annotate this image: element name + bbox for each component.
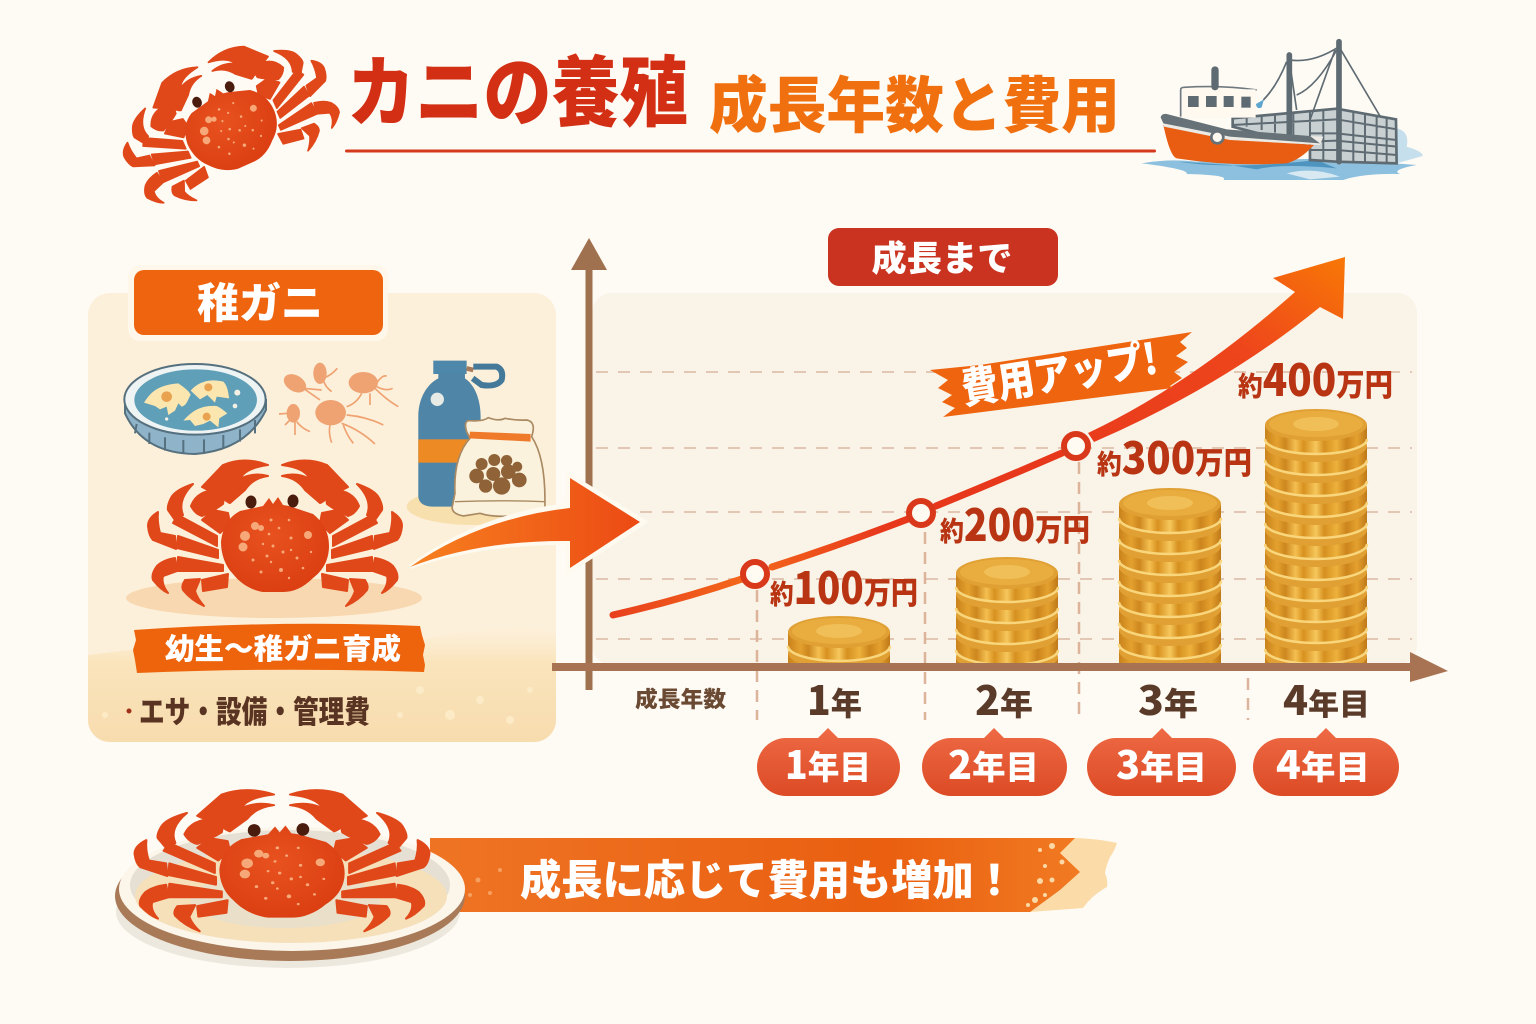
axis: horizontal [552, 652, 1448, 682]
pill: year 2: 2年目 [948, 735, 1039, 791]
coins: year 2 [954, 557, 1060, 663]
panel: chart area [592, 293, 1417, 665]
title sub: 成長年数と費用 [709, 56, 1120, 145]
heading: until grown [828, 228, 1058, 286]
coins: year 3 [1119, 488, 1221, 680]
cost growth line [613, 257, 1345, 615]
tick label: 4th year: 4年目 [1283, 669, 1370, 727]
pill: year 1 [757, 728, 900, 796]
pill: year 3 [1087, 728, 1236, 796]
title main: カニの養殖 [347, 32, 688, 143]
banner: costs rise with growth [430, 838, 1117, 912]
axis label: years of growth: 成長年数 [635, 682, 726, 714]
banner: costs rise with growth: 成長に応じて費用も増加！ [520, 847, 1015, 908]
icon: juvenile crab [148, 460, 402, 606]
label: 2 million yen: 約200万円 [940, 490, 1090, 554]
label: 3 million yen: 約300万円 [1097, 423, 1252, 487]
pill: year 4: 4年目 [1276, 735, 1370, 791]
heading: until grown: 成長まで [872, 231, 1012, 282]
marker: year 3 [1064, 434, 1088, 458]
marker: year 2 [909, 501, 933, 525]
label: 4 million yen: 約400万円 [1238, 345, 1393, 409]
pill: year 2 [922, 728, 1067, 796]
icon: fishing boat and cage [1142, 42, 1423, 180]
icon: petri dish with larvae [124, 364, 266, 454]
pill: year 4 [1253, 728, 1399, 796]
title [347, 32, 1120, 145]
ribbon: cost up: 費用アップ! [956, 326, 1162, 417]
arrow: from juvenile crab to chart [410, 474, 645, 572]
plate [115, 827, 465, 968]
tick label: 3 years: 3年 [1138, 669, 1198, 727]
label: 1 million yen: 約100万円 [770, 553, 918, 617]
panel header: 稚ガニ [197, 270, 323, 331]
cost items: エサ・設備・管理費 [139, 687, 370, 732]
grid lines [596, 372, 1412, 639]
title rule [345, 150, 1156, 152]
icon: crab on plate [135, 790, 429, 931]
pill: year 3: 3年目 [1116, 735, 1207, 791]
tick label: 2 years: 2年 [975, 669, 1033, 727]
icon: larvae [279, 363, 398, 444]
arrow: rising cost [1088, 257, 1345, 442]
coins: year 1 [786, 616, 892, 663]
year guide lines [757, 462, 1248, 720]
tick label: 1 year: 1年 [807, 669, 862, 727]
sand texture [88, 628, 556, 742]
icon: top-left crab [102, 17, 352, 220]
panel header [128, 265, 388, 341]
coin stacks [788, 409, 1367, 686]
crab shadow [126, 578, 422, 618]
banner: larva to juvenile rearing [133, 624, 425, 673]
axis: vertical [571, 238, 607, 690]
panel: juvenile crab [88, 265, 556, 742]
coins: year 4 [1265, 409, 1367, 685]
marker: year 1 [743, 562, 767, 586]
pill: year 1: 1年目 [785, 735, 871, 791]
banner: larva to juvenile rearing: 幼生～稚ガニ育成 [165, 626, 401, 668]
icon: oxygen tank and feed bag [407, 361, 545, 525]
